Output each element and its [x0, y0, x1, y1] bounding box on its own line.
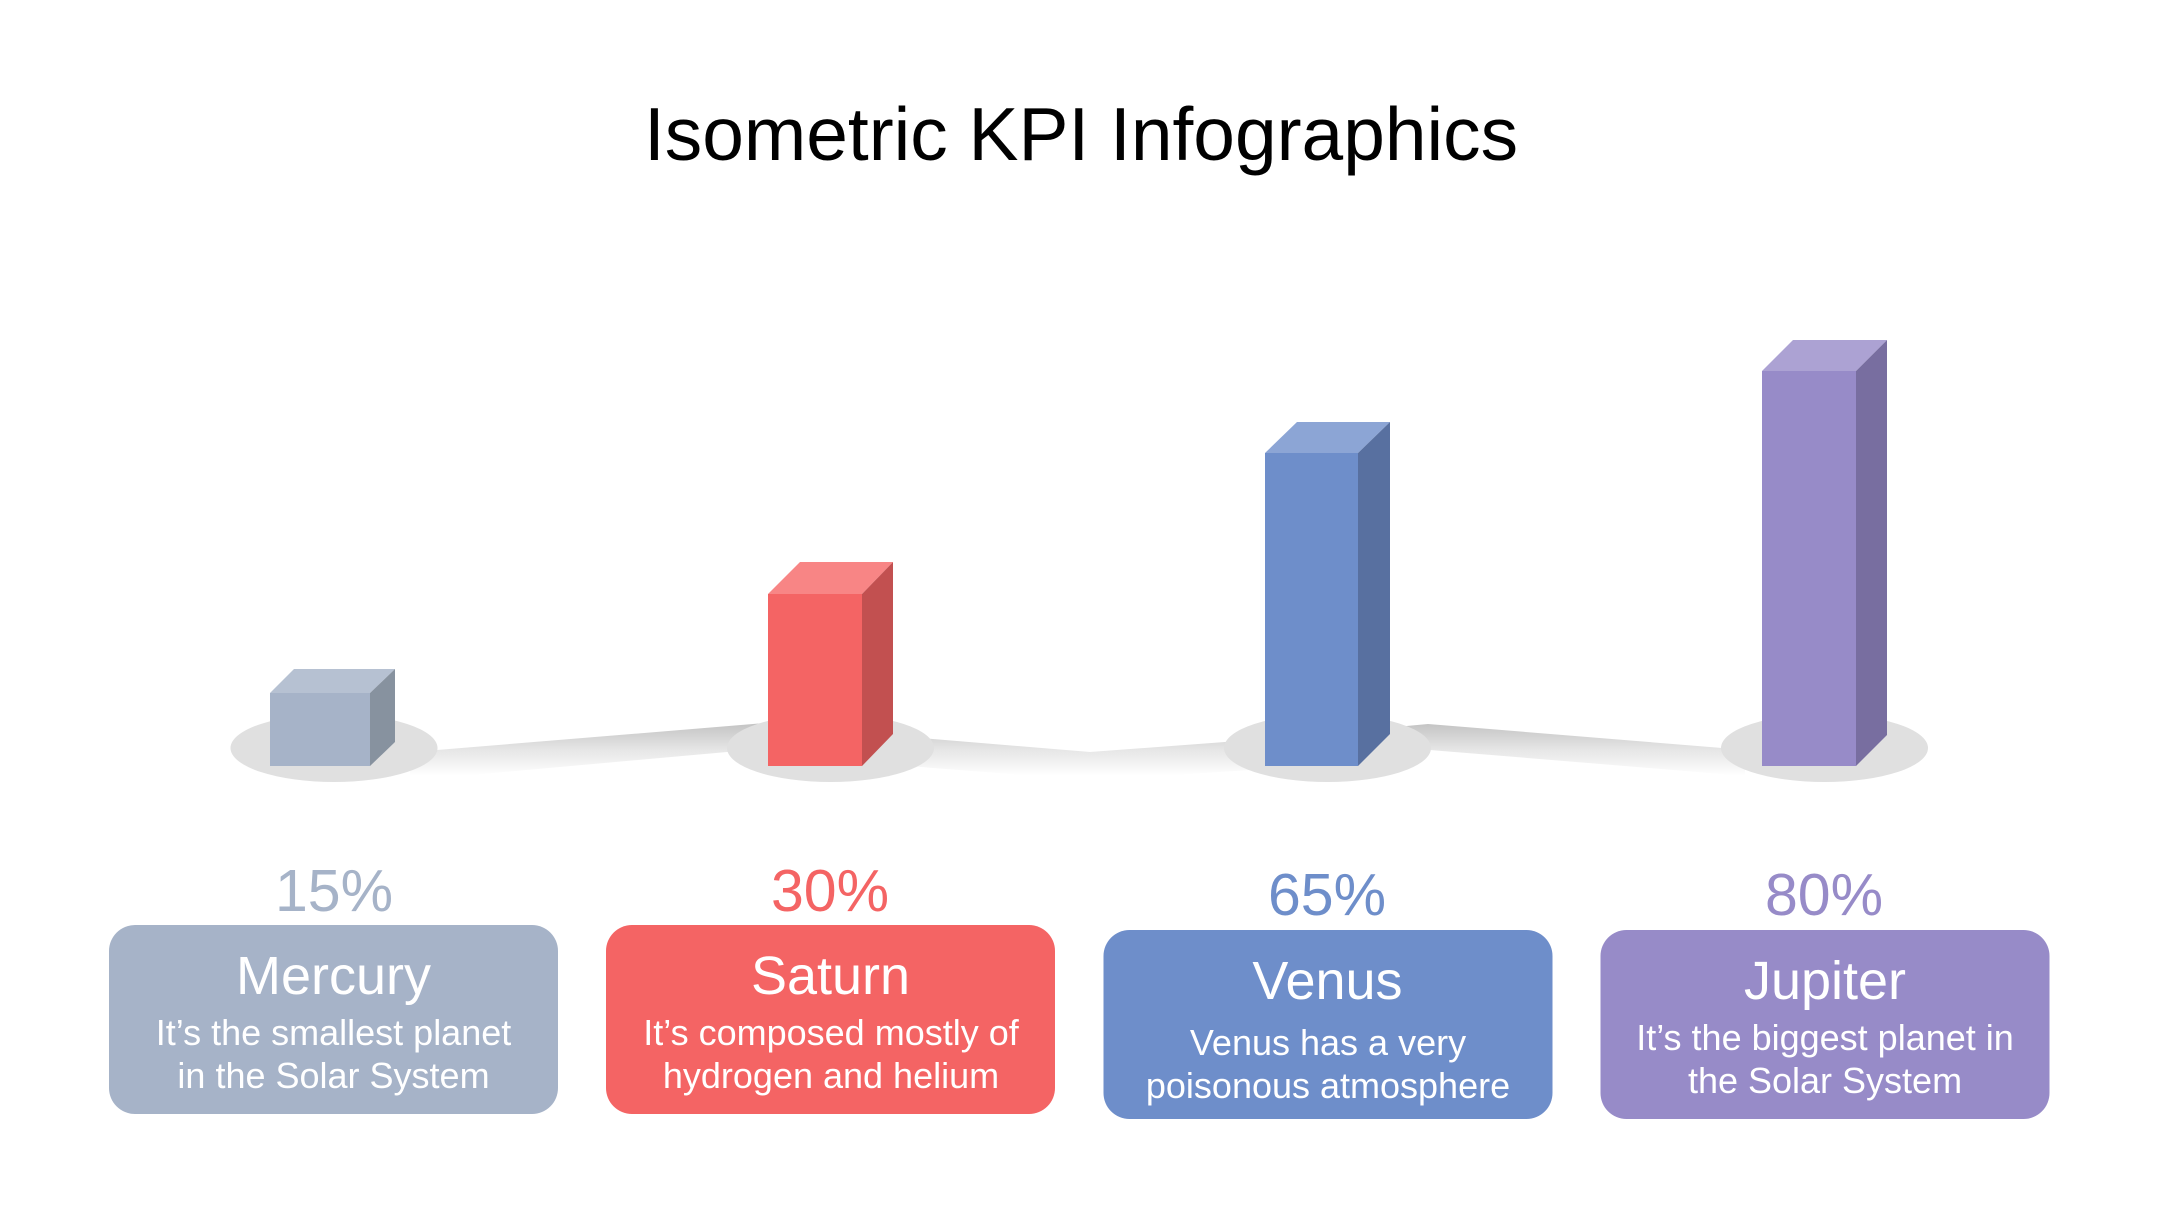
title: Isometric KPI Infographics	[644, 92, 1518, 176]
card: Jupiter: Jupiter	[1744, 951, 1906, 1011]
card: Saturn: Saturn	[751, 946, 910, 1006]
bar: Venus 65%	[1224, 422, 1431, 782]
card: Venus	[1104, 930, 1552, 1119]
card: Venus: Venus	[1252, 951, 1403, 1011]
card: Mercury: Mercury	[236, 946, 431, 1006]
card: Saturn	[606, 925, 1055, 1114]
card: Mercury	[109, 925, 558, 1114]
card: Mercury: in the Solar System	[177, 1055, 490, 1096]
percentage: Venus: 65%	[1268, 862, 1386, 928]
card: Venus: poisonous atmosphere	[1146, 1065, 1510, 1106]
card: Venus: Venus has a very	[1190, 1022, 1466, 1063]
card: Jupiter	[1600, 930, 2050, 1119]
card: Saturn: hydrogen and helium	[663, 1055, 999, 1096]
bar: Jupiter 80%	[1721, 340, 1928, 782]
percentage: Mercury: 15%	[275, 858, 393, 924]
card: Mercury: It’s the smallest planet	[156, 1012, 511, 1053]
card: Saturn: It’s composed mostly of	[643, 1012, 1020, 1053]
card: Jupiter: It’s the biggest planet in	[1636, 1017, 2014, 1058]
bar: Saturn 30%	[727, 562, 934, 782]
bar: Mercury 15%	[230, 669, 438, 782]
percentage: Jupiter: 80%	[1765, 862, 1883, 928]
percentage: Saturn: 30%	[771, 858, 889, 924]
card: Jupiter: the Solar System	[1688, 1060, 1962, 1101]
connecting shadow band	[410, 722, 1745, 780]
